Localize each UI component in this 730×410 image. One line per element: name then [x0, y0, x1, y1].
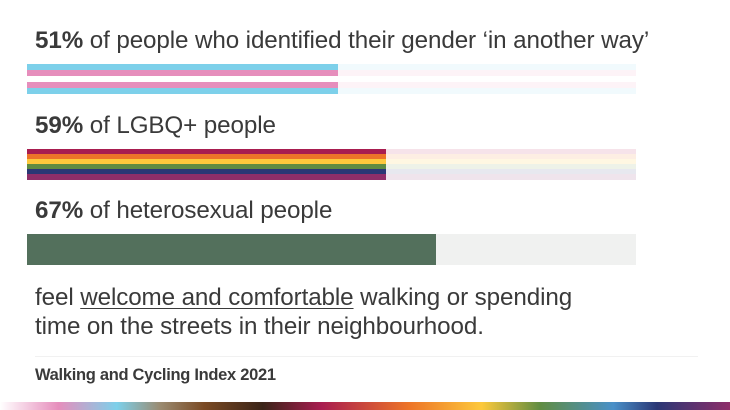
statement text: feel welcome and comfortable walking or spending [35, 284, 572, 311]
gradient footer stripe [0, 402, 730, 410]
bar: rainbow 59% [27, 149, 636, 180]
heading: gender another way: 51% of people who identified their gender ‘in another way’ [35, 27, 649, 54]
source: Walking and Cycling Index 2021 [35, 366, 276, 384]
statement text [35, 284, 572, 340]
bar: green 67% [27, 234, 636, 265]
bar: trans flag 51% [27, 64, 636, 94]
heading: heterosexual: 67% of heterosexual people [35, 197, 332, 224]
divider [35, 356, 698, 357]
statement text: time on the streets in their neighbourhood. [35, 313, 484, 340]
heading: LGBQ+: 59% of LGBQ+ people [35, 112, 276, 139]
